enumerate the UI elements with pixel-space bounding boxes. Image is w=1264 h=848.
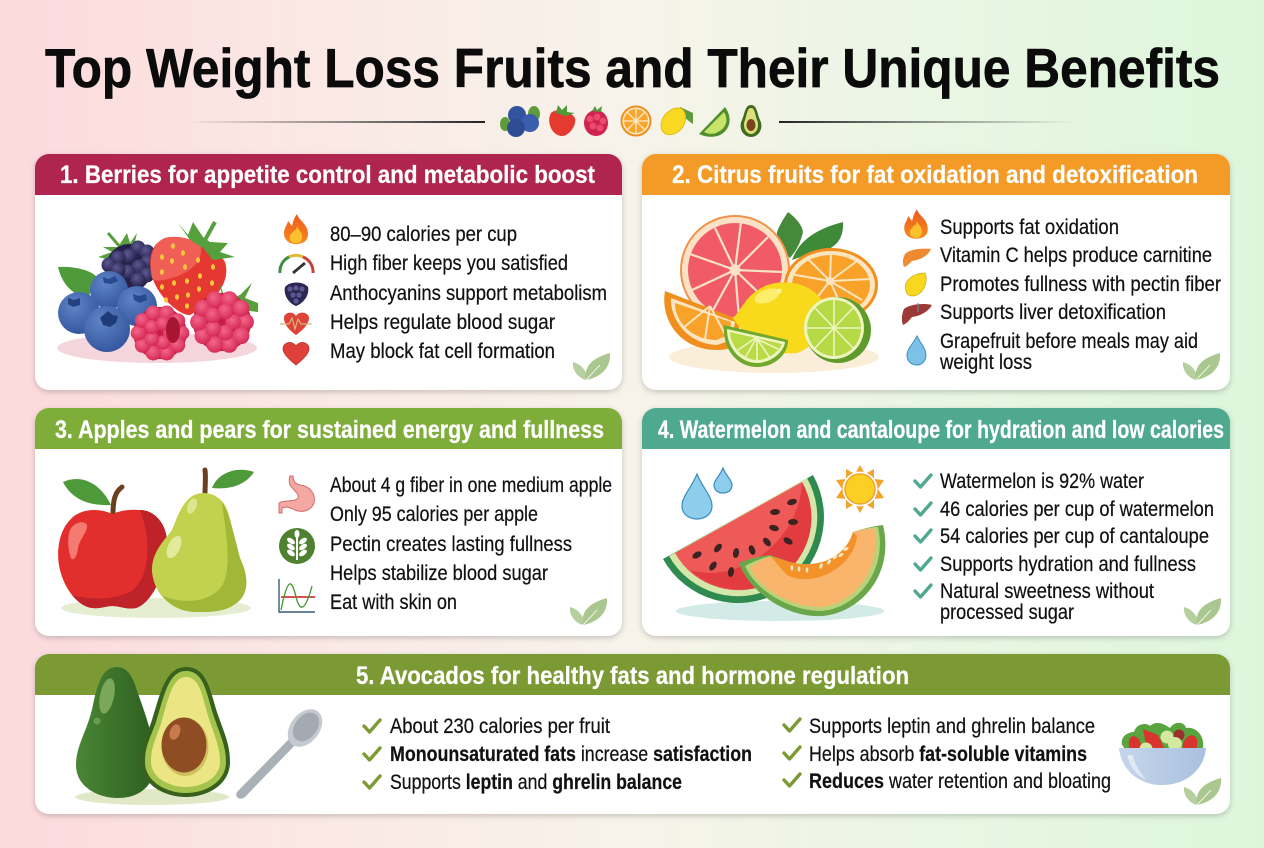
panel header bar	[642, 408, 1230, 449]
icon: mini avocado	[741, 105, 761, 137]
icon: leaf sprig	[570, 598, 607, 625]
benefits list left	[390, 715, 752, 794]
icon: heart	[283, 342, 309, 365]
benefits list: 80–90 calories per cup	[330, 223, 517, 246]
benefits list right: Reduces water retention and bloating	[809, 770, 1111, 793]
icon: blackberry	[285, 282, 308, 306]
heading: 5. Avocados for healthy fats and hormone regulation	[356, 662, 909, 690]
icon: mini strawberry	[549, 105, 575, 136]
benefits list	[330, 474, 612, 614]
icon: water drop	[907, 336, 926, 365]
benefits list: Pectin creates lasting fullness	[330, 533, 572, 556]
icon: leaf sprig	[573, 353, 610, 380]
icon: leaf sprig	[1184, 778, 1221, 805]
benefits list: Helps regulate blood sugar	[330, 311, 555, 334]
benefits list right: Supports leptin and ghrelin balance	[809, 715, 1095, 738]
icon: liver	[902, 303, 932, 325]
icon: flame	[284, 214, 308, 244]
icon: mini lemon	[661, 107, 693, 135]
heading: 3. Apples and pears for sustained energy and fullness	[55, 416, 604, 444]
illustration: mixed berries	[57, 222, 258, 363]
panel header bar	[642, 154, 1230, 195]
icon: lemon	[905, 273, 926, 296]
panel: apples and pears	[35, 408, 622, 636]
benefits list: Only 95 calories per apple	[330, 503, 538, 526]
benefits list: weight loss	[939, 351, 1032, 374]
benefits list: Supports hydration and fullness	[940, 553, 1196, 576]
icon: salad bowl	[1119, 723, 1206, 785]
icon: blood sugar chart	[279, 579, 315, 612]
panel: berries	[35, 154, 622, 390]
icon: wheat badge	[279, 528, 315, 564]
divider with fruit icons	[185, 105, 1076, 137]
icon: sun	[836, 465, 884, 513]
icon: leaf sprig	[1184, 598, 1221, 625]
benefits list left: Monounsaturated fats increase satisfaction	[390, 743, 752, 766]
panel: avocados	[35, 654, 1230, 814]
benefits list: Anthocyanins support metabolism	[330, 282, 607, 305]
benefits list: 46 calories per cup of watermelon	[940, 498, 1214, 521]
benefits list: Helps stabilize blood sugar	[330, 562, 548, 585]
panel header bar	[35, 408, 622, 449]
icon: mini orange	[620, 106, 652, 136]
panel: watermelon and cantaloupe	[642, 408, 1230, 636]
checkmarks right	[784, 719, 800, 786]
benefits list: Promotes fullness with pectin fiber	[940, 273, 1221, 296]
benefits list: processed sugar	[940, 601, 1074, 624]
icon: gauge	[280, 255, 313, 273]
heading: 1. Berries for appetite control and metabolic boost	[60, 161, 596, 189]
benefits list	[940, 470, 1214, 624]
icon: flame	[904, 209, 928, 239]
illustration: avocados and spoon	[75, 667, 329, 805]
icon: mini blueberries	[500, 106, 540, 137]
benefits list: Vitamin C helps produce carnitine	[940, 244, 1212, 267]
panel header bar	[35, 154, 622, 195]
benefits list: About 4 g fiber in one medium apple	[330, 474, 612, 497]
panel header bar	[35, 654, 1230, 695]
icon: liver orange	[903, 249, 931, 267]
benefits list: Watermelon is 92% water	[940, 470, 1144, 493]
benefits list: Eat with skin on	[330, 591, 457, 614]
benefits list: 54 calories per cup of cantaloupe	[940, 525, 1209, 548]
benefits list: High fiber keeps you satisfied	[330, 252, 568, 275]
benefits list: Supports fat oxidation	[940, 216, 1119, 239]
benefits list: May block fat cell formation	[330, 340, 555, 363]
benefits list	[330, 223, 607, 363]
checkmarks left	[364, 720, 380, 788]
icon: mini lime	[699, 107, 730, 137]
icon: heart with pulse	[280, 313, 312, 335]
illustration: apple and pear	[58, 470, 254, 618]
benefits list left: Supports leptin and ghrelin balance	[390, 771, 682, 794]
benefits list right: Helps absorb fat-soluble vitamins	[809, 743, 1087, 766]
benefits list right	[809, 715, 1111, 793]
benefits list: Grapefruit before meals may aid	[940, 330, 1198, 353]
panel: citrus	[642, 154, 1230, 390]
illustration: citrus fruits	[664, 212, 879, 373]
benefits list left: About 230 calories per fruit	[390, 715, 610, 738]
checkmarks	[915, 475, 931, 597]
icon: leaf sprig	[1183, 353, 1220, 380]
benefits list: Natural sweetness without	[940, 580, 1154, 603]
icon: mini raspberry	[584, 106, 608, 136]
icon: stomach	[279, 476, 314, 513]
benefits list: Supports liver detoxification	[940, 301, 1166, 324]
heading: 2. Citrus fruits for fat oxidation and detoxification	[672, 161, 1198, 189]
benefits list	[939, 216, 1221, 374]
illustration: watermelon and cantaloupe	[663, 468, 885, 621]
